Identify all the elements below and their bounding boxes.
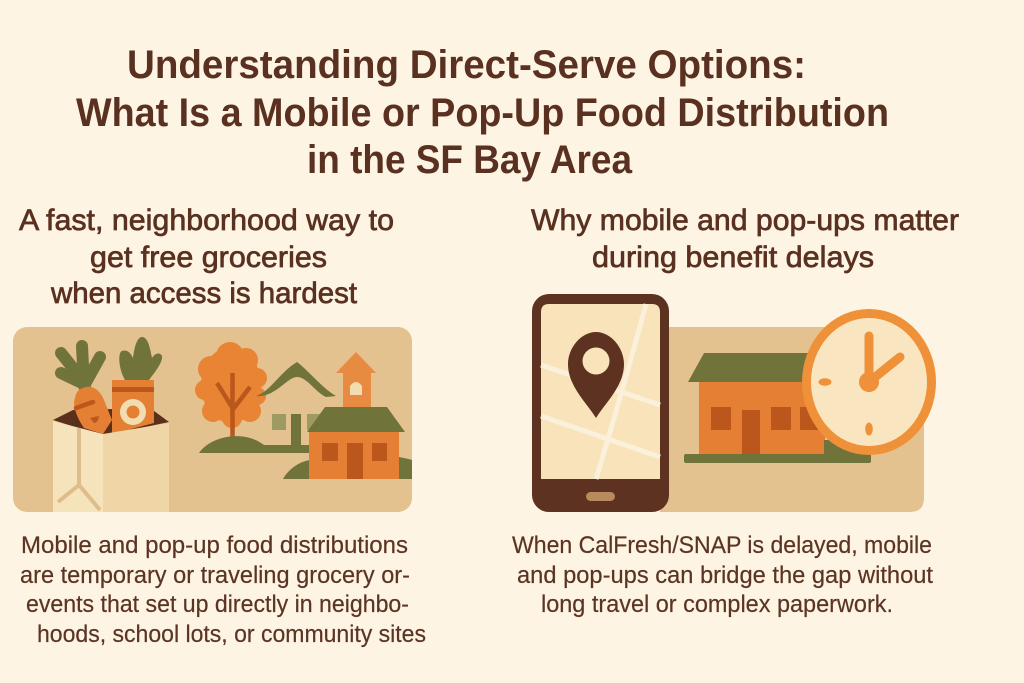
heading: right column: during benefit delays — [592, 241, 874, 274]
text block: left description — [20, 532, 426, 648]
icon: carrot and can in grocery bag — [53, 337, 169, 512]
icon: autumn tree — [195, 342, 267, 453]
text block: right description: long travel or complex paperwork. — [541, 591, 893, 618]
panel: groceries and neighborhood illustration — [13, 327, 412, 512]
title: Understanding Direct-Serve Options: — [127, 43, 806, 87]
icon: school with bell tower — [283, 352, 412, 479]
text block: left description: are temporary or traveling grocery or- — [20, 562, 410, 589]
icon: phone with map pin — [532, 294, 669, 512]
heading: left column: get free groceries — [90, 241, 327, 274]
title: in the SF Bay Area — [307, 138, 633, 182]
heading: right column — [531, 204, 959, 274]
heading: right column: Why mobile and pop-ups matter — [531, 204, 959, 237]
title — [76, 43, 889, 182]
text block: right description — [512, 532, 933, 618]
text block: left description: hoods, school lots, or community sites — [37, 621, 426, 648]
text block: right description: and pop-ups can bridge the gap without — [517, 562, 933, 589]
icon: clock — [802, 309, 936, 455]
heading: left column: A fast, neighborhood way to — [19, 204, 394, 237]
icon: storefront house — [684, 353, 871, 463]
heading: left column — [19, 204, 394, 310]
text block: right description: When CalFresh/SNAP is delayed, mobile — [512, 532, 932, 559]
title: What Is a Mobile or Pop-Up Food Distribution — [76, 91, 889, 135]
icon: distant house — [199, 362, 336, 453]
text block: left description: events that set up directly in neighbo- — [26, 591, 409, 618]
heading: left column: when access is hardest — [50, 277, 358, 310]
panel: phone, house and clock illustration — [532, 294, 936, 512]
text block: left description: Mobile and pop-up food distributions — [21, 532, 408, 559]
